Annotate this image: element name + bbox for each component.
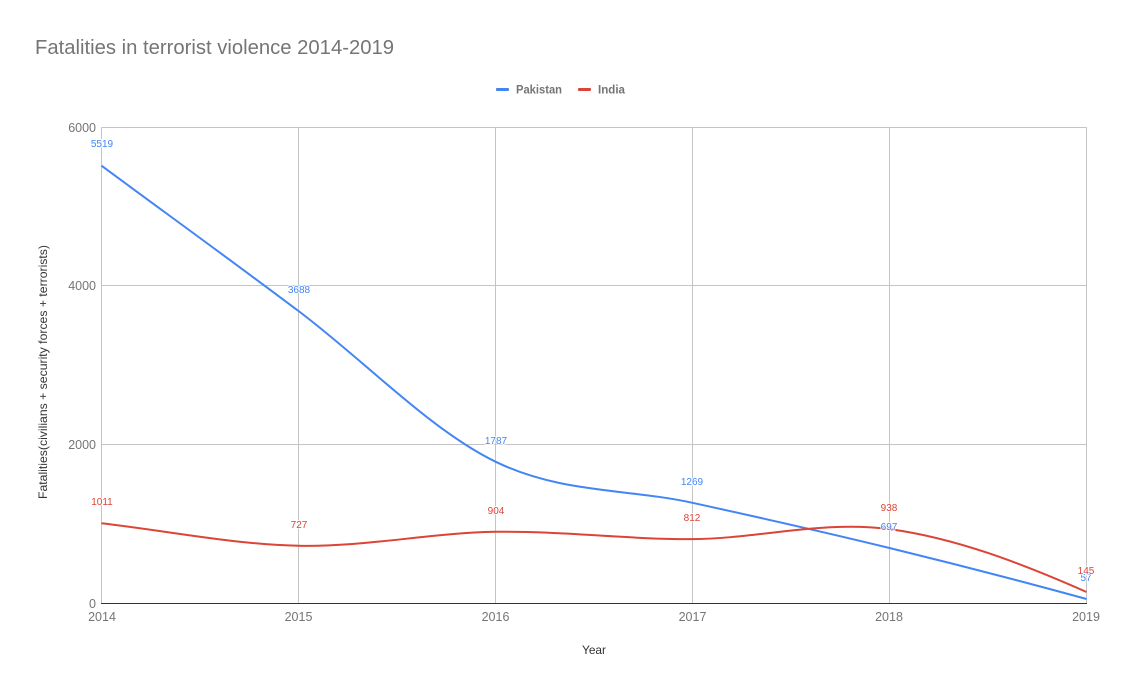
line: India bbox=[102, 523, 1086, 592]
x axis tick labels: 2017 bbox=[679, 610, 706, 624]
data labels: India: 1011 bbox=[91, 497, 113, 508]
data labels: India bbox=[91, 497, 1095, 577]
data labels: India: 904 bbox=[488, 506, 505, 517]
data labels: India: 938 bbox=[881, 503, 898, 514]
x axis tick labels: 2015 bbox=[285, 610, 312, 624]
legend: Pakistan: Pakistan bbox=[516, 82, 562, 96]
x axis tick labels: 2016 bbox=[482, 610, 509, 624]
legend: India: India bbox=[598, 82, 625, 96]
y axis tick labels: 4000 bbox=[68, 279, 96, 293]
x axis baseline bbox=[101, 602, 1087, 604]
y axis tick labels bbox=[68, 121, 96, 611]
data labels: India: 812 bbox=[684, 513, 701, 524]
x axis tick labels: 2018 bbox=[875, 610, 903, 624]
x axis tick labels bbox=[88, 610, 1100, 624]
title: Fatalities in terrorist violence 2014-2019 bbox=[35, 37, 394, 59]
data labels: India: 145 bbox=[1078, 566, 1095, 577]
plot grid bbox=[102, 128, 1086, 604]
x axis title: Year bbox=[582, 643, 606, 657]
line: Pakistan bbox=[102, 166, 1086, 599]
data labels: Pakistan: 57 bbox=[1080, 573, 1092, 584]
y axis title: Fatalities(civilians + security forces + terrorists) bbox=[36, 245, 50, 499]
data labels: Pakistan: 697 bbox=[881, 522, 898, 533]
data labels: Pakistan: 3688 bbox=[288, 285, 311, 296]
data labels: India: 727 bbox=[291, 520, 308, 531]
y axis tick labels: 2000 bbox=[68, 438, 96, 452]
x axis tick labels: 2019 bbox=[1072, 610, 1100, 624]
data labels: Pakistan: 1269 bbox=[681, 477, 704, 488]
data labels: Pakistan: 5519 bbox=[91, 139, 114, 150]
data labels: Pakistan: 1787 bbox=[485, 436, 508, 447]
data labels: Pakistan bbox=[91, 139, 1092, 584]
y axis tick labels: 6000 bbox=[68, 121, 96, 135]
legend bbox=[496, 82, 625, 96]
x axis tick labels: 2014 bbox=[88, 610, 116, 624]
y axis tick labels: 0 bbox=[89, 597, 96, 611]
